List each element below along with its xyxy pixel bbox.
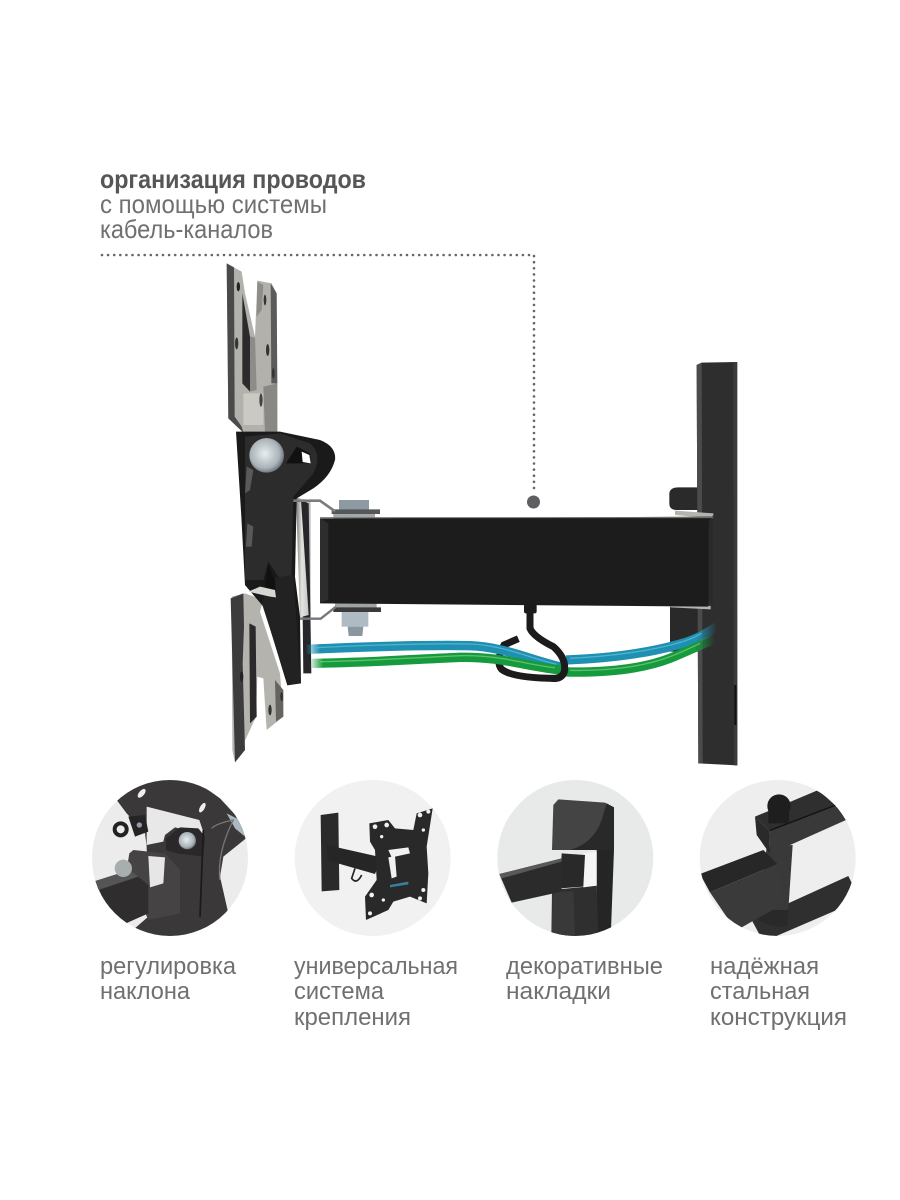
cable hook: front section <box>524 604 565 678</box>
label: decorative covers: декоративные <box>506 953 663 980</box>
chrome tilt strip <box>296 497 311 617</box>
feature: universal mounting system <box>294 780 458 1031</box>
cable hook: rear section <box>499 639 557 678</box>
green cable <box>312 639 715 672</box>
callout line 3: кабель-каналов <box>100 214 273 244</box>
label: tilt adjustment: регулировка <box>100 953 237 980</box>
dotted leader line to cable channel <box>102 255 540 508</box>
label: steel construction: надёжная <box>710 953 819 980</box>
photo circle: steel arm <box>698 778 860 942</box>
feature: reliable steel construction <box>698 778 860 1031</box>
TV plate and tilt bracket <box>227 263 335 762</box>
upper bolt and washer <box>293 500 380 519</box>
lower bolt and washer <box>300 603 381 636</box>
arm <box>320 515 713 607</box>
pivot cap <box>669 487 700 510</box>
lower VESA plate <box>231 593 283 762</box>
label: universal mounting: система <box>294 978 385 1005</box>
callout text: cable management <box>100 164 366 244</box>
label: universal mounting: универсальная <box>294 953 458 980</box>
label: tilt adjustment: наклона <box>100 978 191 1005</box>
washers at wall pivot <box>671 511 713 609</box>
swing arm, wall plate and cables <box>293 362 737 765</box>
wall plate rear post <box>670 607 702 652</box>
tilt screw <box>249 438 284 473</box>
black tilt bracket <box>236 432 335 685</box>
upper VESA plate <box>227 263 277 433</box>
photo circle: whole mount <box>295 780 451 936</box>
photo circle: tilt joint <box>90 778 250 938</box>
feature: decorative covers <box>495 778 663 1005</box>
wall plate <box>697 362 737 765</box>
label: decorative covers: накладки <box>506 978 611 1005</box>
blue cable <box>307 627 717 667</box>
callout heading: организация проводов <box>100 164 366 194</box>
dark rear strip <box>301 500 311 673</box>
label: universal mounting: крепления <box>294 1004 411 1031</box>
label: steel construction: конструкция <box>710 1004 847 1031</box>
photo circle: decorative cap <box>495 778 655 938</box>
label: steel construction: стальная <box>710 978 810 1005</box>
callout line 2: с помощью системы <box>100 189 327 219</box>
feature: tilt adjustment <box>90 778 250 1005</box>
